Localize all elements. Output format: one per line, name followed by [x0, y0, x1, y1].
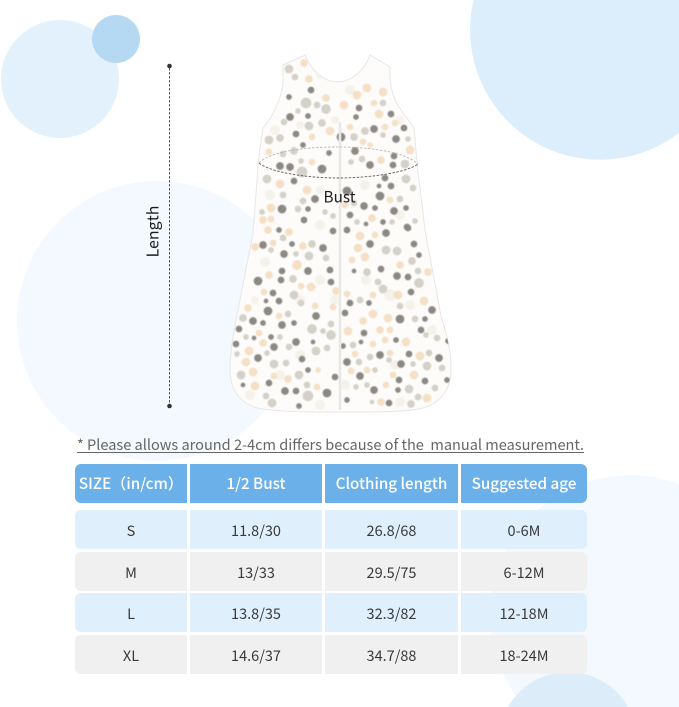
- measurement note: * Please allows around 2-4cm differs because of the manual measurement.: [77, 434, 584, 455]
- size table: [75, 464, 587, 674]
- row L: 32.3/82: [367, 603, 416, 624]
- table header: SIZE（in/cm）: [79, 472, 183, 494]
- row XL: [75, 635, 587, 674]
- table header: [75, 464, 587, 503]
- row XL: 14.6/37: [231, 645, 281, 666]
- bust label: Bust: [324, 186, 356, 208]
- bust measurement ellipse: [259, 147, 418, 178]
- row L: L: [127, 603, 135, 624]
- row XL: 18-24M: [500, 645, 548, 666]
- dot pattern: [233, 60, 450, 410]
- row S: S: [127, 520, 135, 541]
- row M: 29.5/75: [367, 562, 416, 583]
- row XL: 34.7/88: [367, 645, 416, 666]
- table header: 1/2 Bust: [226, 472, 286, 494]
- row S: [75, 510, 587, 549]
- row M: [75, 552, 587, 591]
- table header: Clothing length: [336, 472, 447, 494]
- zipper: [339, 122, 341, 410]
- row S: 26.8/68: [367, 520, 416, 541]
- sleep sack body: [230, 55, 451, 412]
- row L: 13.8/35: [231, 603, 281, 624]
- length measurement line: [167, 64, 172, 408]
- row L: 12-18M: [500, 603, 548, 624]
- row M: 6-12M: [504, 562, 544, 583]
- row S: 11.8/30: [231, 520, 281, 541]
- row M: 13/33: [237, 562, 275, 583]
- row S: 0-6M: [508, 520, 540, 541]
- row XL: XL: [123, 645, 139, 666]
- table header: Suggested age: [472, 472, 576, 494]
- row M: M: [125, 562, 137, 583]
- row L: [75, 593, 587, 632]
- garment illustration with measurement marks: [146, 54, 452, 412]
- length label: Length: [140, 206, 164, 257]
